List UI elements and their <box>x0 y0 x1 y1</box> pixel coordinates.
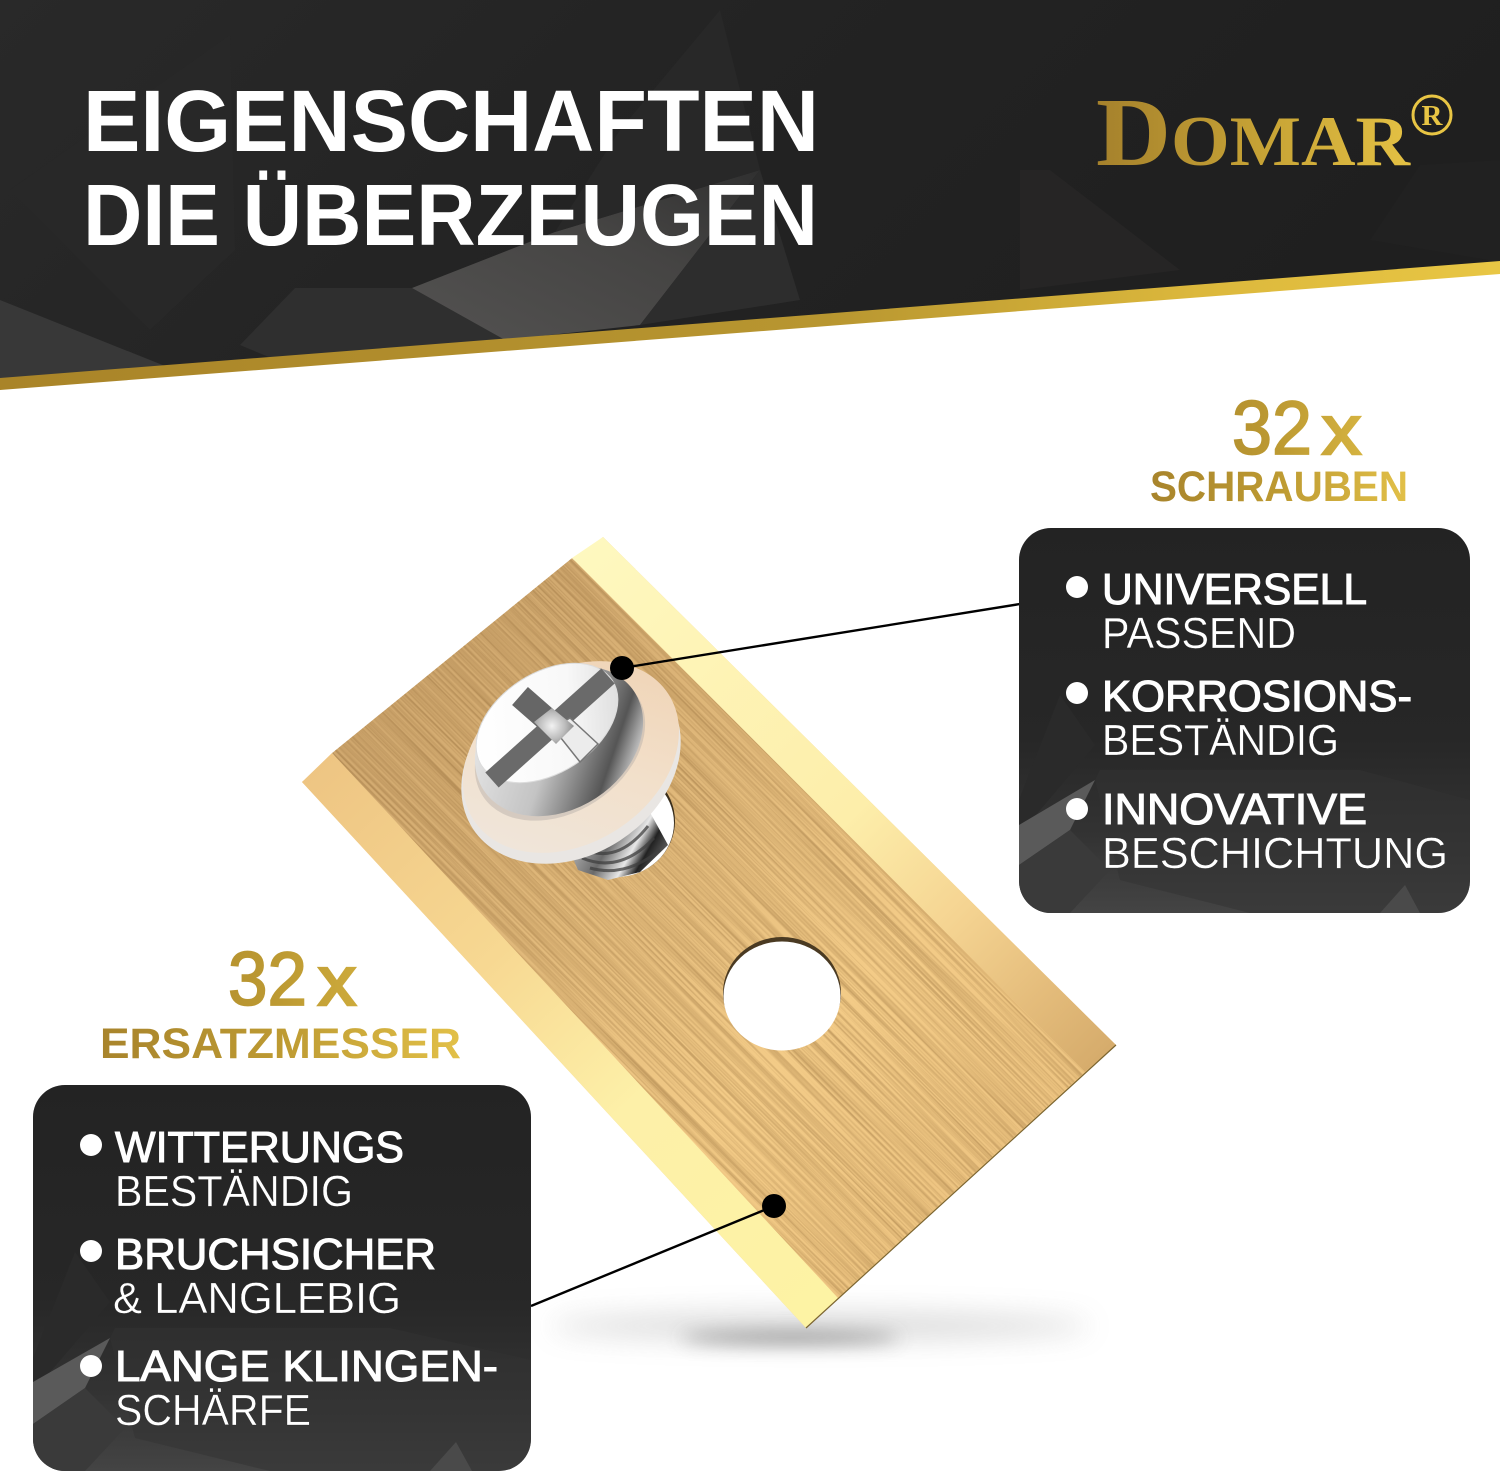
heading: 32 x Ersatzmesser: ERSATZMESSER <box>100 1020 461 1068</box>
panel: Ersatzmesser <box>33 1085 531 1471</box>
item: innovative beschichtung: BESCHICHTUNG <box>1102 829 1448 878</box>
item: bruchsicher und langlebig: & LANGLEBIG <box>113 1274 401 1323</box>
screw hole <box>557 765 675 877</box>
heading: 32 x Schrauben: x <box>1322 391 1361 469</box>
mounting hole <box>723 937 841 1050</box>
heading: 32 x Schrauben: 32 <box>1232 386 1312 471</box>
item: lange klingenschärfe <box>80 1342 498 1435</box>
logo: Domar: OMAR <box>1171 103 1411 181</box>
logo: Domar: R <box>1422 100 1444 132</box>
heading: 32 x Ersatzmesser <box>100 937 461 1068</box>
callout line: blade <box>531 1194 786 1306</box>
blade yellow lower edge <box>302 753 838 1328</box>
logo: Domar <box>1096 79 1451 187</box>
heading: 32 x Ersatzmesser: 32 <box>228 937 307 1022</box>
item: witterungsbeständig: BESTÄNDIG <box>115 1167 353 1216</box>
title: EIGENSCHAFTEN <box>83 73 819 170</box>
item: bruchsicher und langlebig <box>80 1230 436 1323</box>
item: korrosionsbeständig <box>1066 672 1412 765</box>
callout line: screw <box>610 604 1020 680</box>
screw thread <box>572 805 668 880</box>
blade upper bevel <box>572 537 1116 1072</box>
item: universell passend <box>1066 565 1367 658</box>
header banner <box>0 0 1500 390</box>
item: innovative beschichtung: INNOVATIVE <box>1102 785 1367 834</box>
item: witterungsbeständig <box>80 1123 404 1216</box>
item: korrosionsbeständig: BESTÄNDIG <box>1102 716 1339 765</box>
gold diagonal band <box>0 261 1500 390</box>
heading: 32 x Schrauben <box>1150 386 1408 511</box>
title: DIE ÜBERZEUGEN <box>83 167 818 264</box>
item: innovative beschichtung <box>1066 785 1448 878</box>
item: witterungsbeständig: WITTERUNGS <box>115 1123 404 1172</box>
screw <box>424 622 718 904</box>
item: universell passend: UNIVERSELL <box>1102 565 1367 614</box>
panel: Schrauben <box>1019 528 1470 913</box>
item: lange klingenschärfe: SCHÄRFE <box>115 1386 311 1435</box>
item: korrosionsbeständig: KORROSIONS- <box>1102 672 1412 721</box>
item: lange klingenschärfe: LANGE KLINGEN- <box>115 1342 498 1391</box>
cross recess <box>492 676 608 780</box>
title <box>83 73 819 264</box>
heading: 32 x Schrauben: SCHRAUBEN <box>1150 463 1408 511</box>
blade brushed surface <box>332 558 1084 1298</box>
plastic washer <box>424 622 718 904</box>
item: bruchsicher und langlebig: BRUCHSICHER <box>115 1230 436 1279</box>
heading: 32 x Ersatzmesser: x <box>318 942 356 1020</box>
logo: Domar: D <box>1096 79 1171 187</box>
screw head <box>446 635 673 851</box>
blade <box>302 537 1116 1328</box>
blade shadow <box>550 1314 1090 1344</box>
item: universell passend: PASSEND <box>1102 609 1296 658</box>
blade dark cutting edge <box>806 1045 1116 1328</box>
